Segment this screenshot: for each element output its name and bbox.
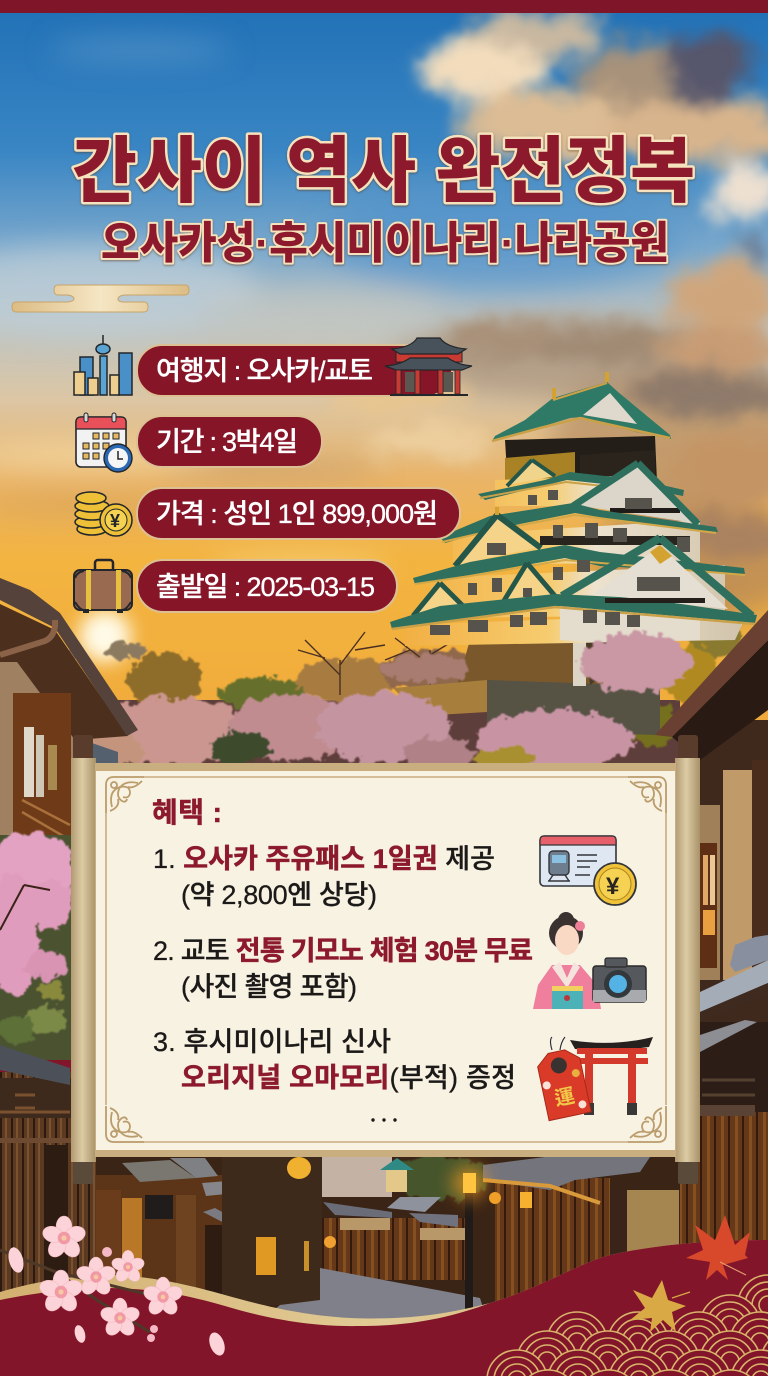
signboard tower	[380, 1158, 414, 1192]
left lower building	[0, 1045, 72, 1302]
left scroll roller	[71, 735, 96, 1184]
right scroll roller	[675, 735, 700, 1184]
info pill: destination	[137, 345, 452, 396]
castle third wall, gable and roof	[440, 463, 718, 566]
cherry blossom tree row	[75, 632, 691, 773]
castle stone base	[393, 636, 660, 735]
top border bar	[0, 0, 768, 13]
icon: transit pass and yen coin: ¥	[606, 873, 620, 900]
benefit 1 text: 1. 오사카 주유패스 1일권 제공	[153, 844, 495, 874]
cherry blossom branch	[0, 1216, 228, 1358]
street left buildings	[72, 1157, 267, 1305]
stone street	[250, 1268, 490, 1330]
castle windows	[468, 490, 690, 597]
benefits heading: 혜택 :	[152, 797, 222, 828]
icon: torii gate and omamori charm	[535, 1037, 653, 1121]
tall dark building with lantern	[222, 1157, 322, 1305]
benefit 3 text: 3. 후시미이나리 신사	[153, 1027, 391, 1057]
icon: golden maple leaf	[630, 1280, 690, 1332]
benefit 3 text	[153, 1027, 516, 1093]
icon: kimono woman and camera	[533, 912, 646, 1009]
icon: coins	[75, 492, 132, 536]
castle second wall and roof	[413, 536, 745, 618]
bottom street scene	[72, 1150, 705, 1330]
benefit 2 text	[153, 936, 533, 1002]
icon: coins: ¥	[110, 511, 120, 531]
castle top roof	[492, 372, 671, 441]
info pill: duration: 기간 : 3박4일	[156, 427, 298, 457]
background: sunset sky with clouds	[0, 0, 768, 800]
benefit 2 text: (사진 촬영 포함)	[181, 972, 357, 1002]
sky gap and garden	[322, 1157, 392, 1197]
parchment	[95, 763, 676, 1157]
benefit 3 text: 오리지널 오마모리(부적) 증정	[181, 1063, 516, 1093]
right traditional house	[655, 610, 768, 1242]
background trees behind the castle	[80, 622, 741, 770]
bottom red wave with gold band	[0, 1240, 768, 1376]
info pill: departure date: 출발일 : 2025-03-15	[156, 572, 375, 602]
left traditional house	[0, 578, 138, 843]
castle dark upper floor	[505, 436, 657, 488]
icon: torii gate and omamori charm: 運	[552, 1084, 577, 1111]
info pill: price	[137, 488, 460, 539]
benefits scroll panel	[71, 735, 700, 1184]
info pill: destination: 여행지 : 오사카/교토	[156, 356, 373, 386]
icon: Japanese gate	[385, 338, 472, 396]
benefit 1 text	[153, 844, 495, 910]
title: 간사이 역사 완전정복	[72, 132, 695, 212]
icon: suitcase	[74, 560, 132, 613]
icon: city skyline	[74, 335, 132, 395]
street lamp	[453, 1167, 485, 1313]
far houses	[322, 1197, 472, 1280]
icon: red maple leaf	[686, 1215, 750, 1280]
icon: calendar and clock	[76, 413, 132, 472]
left cherry tree and garden	[0, 832, 76, 1060]
benefit 1 text: (약 2,800엔 상당)	[181, 880, 377, 910]
Osaka castle illustration	[390, 372, 757, 735]
decorative gold cloud	[12, 285, 189, 312]
icon: transit pass and yen coin	[540, 836, 636, 905]
ellipsis	[371, 1118, 397, 1122]
parchment border and corner ornaments	[106, 777, 666, 1142]
info pill: price: 가격 : 성인 1인 899,000원	[156, 499, 438, 529]
benefit 2 text: 2. 교토 전통 기모노 체험 30분 무료	[153, 936, 533, 966]
castle fourth roof and wall	[478, 460, 684, 506]
info pill: duration	[137, 416, 322, 467]
subtitle: 오사카성·후시미이나리·나라공원	[101, 219, 669, 268]
right street building	[483, 1150, 705, 1303]
seigaiha wave pattern	[487, 1275, 768, 1376]
info pill: departure date	[137, 560, 397, 612]
castle first wall and lowest roof	[390, 538, 757, 646]
